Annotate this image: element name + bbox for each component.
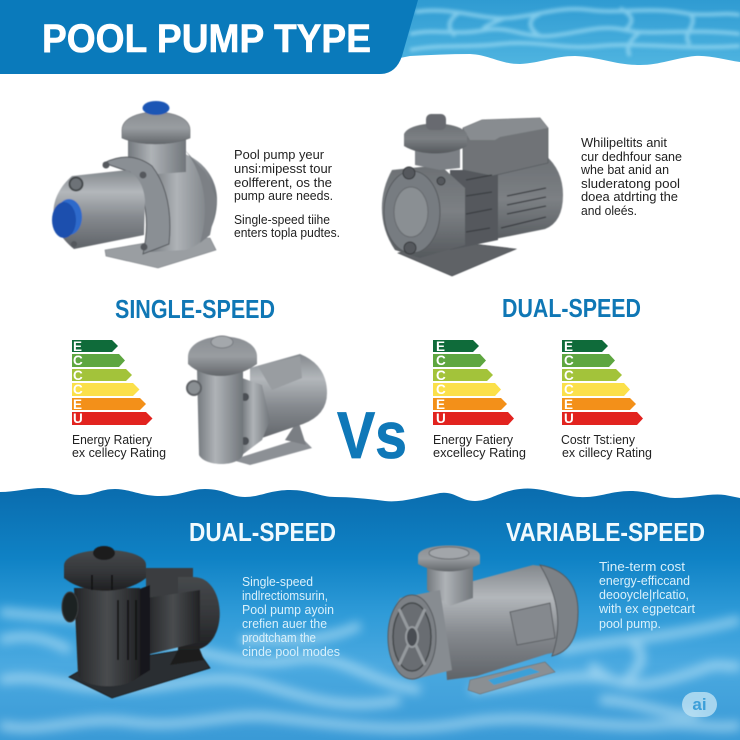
label: energy rating 1: ex cellecy Rating <box>72 445 166 460</box>
energy rating chart 1: C <box>73 353 83 368</box>
heading: variable-speed: VARIABLE-SPEED <box>506 517 705 547</box>
label: energy rating 1: Energy Ratiery <box>72 432 152 447</box>
label: energy rating 1 <box>72 432 166 460</box>
blue top knob <box>142 101 170 115</box>
body text: top left: eolfferent, os the <box>234 175 332 190</box>
energy rating chart 3: C <box>564 353 574 368</box>
bottom water panel <box>0 488 740 740</box>
pump: top right grey with motor box <box>382 114 563 276</box>
body text: top left: Pool pump yeur <box>234 147 325 162</box>
versus mark: Vs <box>337 398 407 472</box>
energy rating chart 1: E <box>73 397 82 412</box>
body text: bottom right: pool pump. <box>599 616 661 631</box>
body text: top right: and oleés. <box>581 203 637 218</box>
energy rating chart 2: E <box>436 339 445 354</box>
body text: bottom right: with ex egpetcart <box>598 601 695 616</box>
body text: bottom right: deooycle|rlcatio, <box>599 587 689 602</box>
energy rating chart 1: C <box>73 382 83 397</box>
body text: bottom right: energy-efficcand <box>599 573 690 588</box>
body text: top left: unsi:mipesst tour <box>234 161 333 176</box>
body text: bottom right <box>598 559 695 631</box>
energy rating chart 3: U <box>564 411 574 426</box>
body text: top left <box>234 147 340 240</box>
energy rating chart 3: E <box>564 339 573 354</box>
body text: top right: sluderatong pool <box>581 176 680 191</box>
energy rating chart 2: C <box>436 382 446 397</box>
body text: top left: enters topla pudtes. <box>234 225 340 240</box>
ai badge: ai <box>692 695 707 714</box>
label: energy rating 2 <box>433 432 526 460</box>
body text: top right: cur dedhfour sane <box>581 149 682 164</box>
top water strip <box>400 0 740 65</box>
body text: top right: doea atdrting the <box>581 189 678 204</box>
title: POOL PUMP TYPE <box>42 17 371 61</box>
body text: bottom left <box>242 574 340 659</box>
pump: centre grey <box>187 336 327 465</box>
body text: bottom left: prodtcham the <box>242 630 316 645</box>
energy rating chart 3 <box>562 339 643 426</box>
pump: bottom left black <box>62 546 220 698</box>
heading: dual-speed on water: DUAL-SPEED <box>189 517 336 547</box>
body text: top right: Whilipeltits anit <box>581 135 667 150</box>
energy rating chart 3: E <box>564 397 573 412</box>
heading: dual-speed: DUAL-SPEED <box>502 293 641 323</box>
energy rating chart 1 <box>72 339 152 426</box>
pump: top left grey with blue caps <box>52 101 217 268</box>
energy rating chart 3: C <box>564 368 574 383</box>
ai badge <box>682 692 717 717</box>
body text: bottom left: cinde pool modes <box>242 644 340 659</box>
energy rating chart 2: C <box>436 368 446 383</box>
pump: bottom right grey <box>388 546 578 694</box>
energy rating chart 2: U <box>436 411 446 426</box>
body text: bottom right: Tine-term cost <box>599 559 685 574</box>
label: cost rating: Costr Tst:ieny <box>561 432 635 447</box>
energy rating chart 1: U <box>73 411 83 426</box>
body text: bottom left: indlrectiomsurin, <box>242 588 328 603</box>
body text: top right: whe bat anid an <box>580 162 669 177</box>
heading: single-speed: SINGLE-SPEED <box>115 294 275 324</box>
energy rating chart 3: C <box>564 382 574 397</box>
title banner <box>0 0 418 74</box>
body text: bottom left: crefien auer the <box>242 616 327 631</box>
blue front cap <box>56 199 82 235</box>
label: energy rating 2: Energy Fatiery <box>433 432 513 447</box>
label: cost rating <box>561 432 652 460</box>
body text: bottom left: Single-speed <box>242 574 313 589</box>
energy rating chart 2: E <box>436 397 445 412</box>
energy rating chart 2: C <box>436 353 446 368</box>
label: cost rating: ex cillecy Rating <box>562 445 652 460</box>
body text: bottom left: Pool pump ayoin <box>242 602 334 617</box>
energy rating chart 2 <box>433 339 514 426</box>
label: energy rating 2: excellecy Rating <box>433 445 526 460</box>
body text: top right <box>580 135 682 218</box>
energy rating chart 1: C <box>73 368 83 383</box>
energy rating chart 1: E <box>73 339 82 354</box>
body text: top left: pump aure needs. <box>234 188 333 203</box>
body text: top left: Single-speed tiihe <box>234 212 330 227</box>
